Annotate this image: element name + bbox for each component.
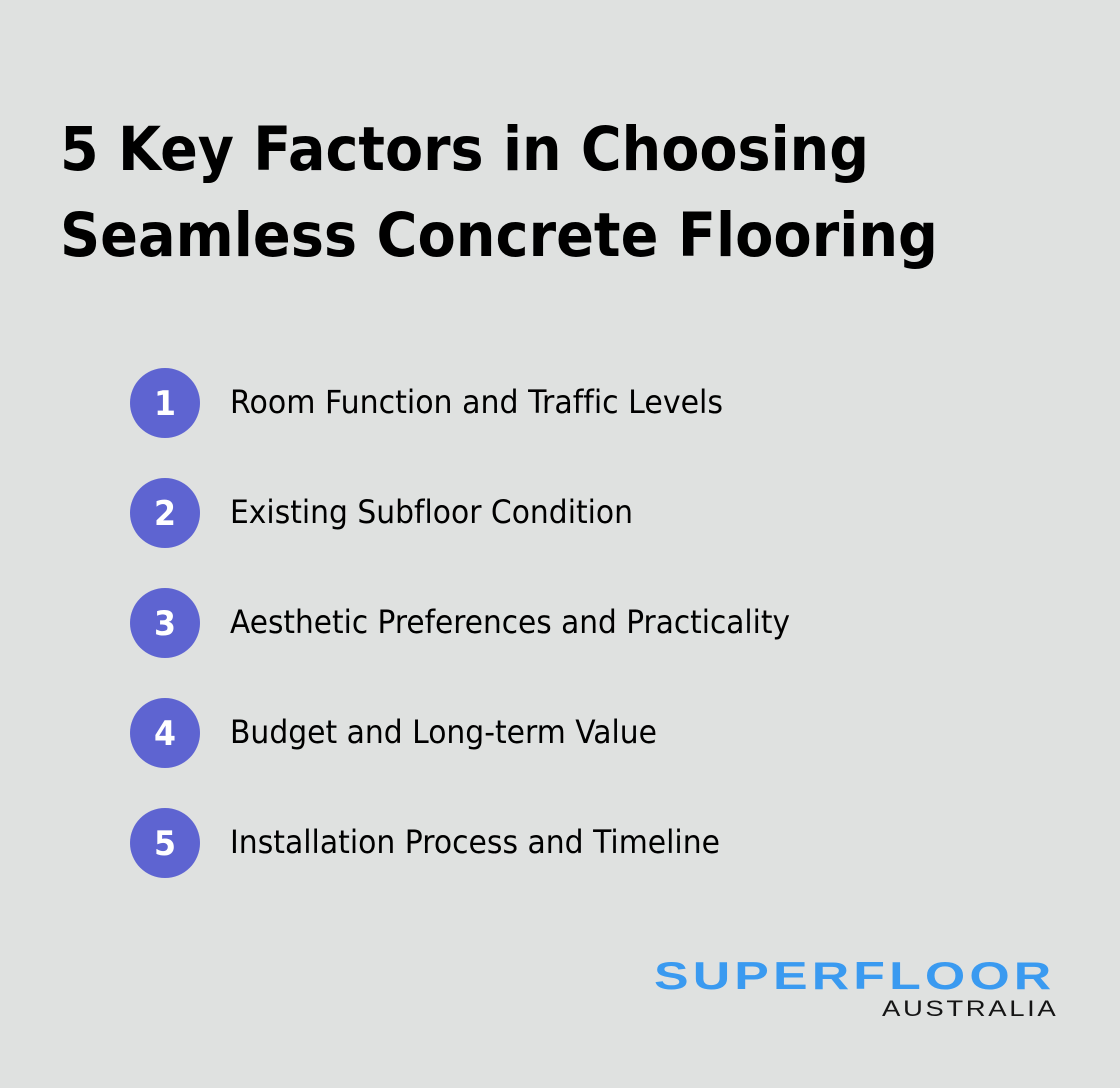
item 2: 2 bbox=[154, 494, 176, 534]
item 4 bbox=[130, 698, 657, 768]
logo: Superfloor Australia bbox=[654, 953, 1058, 1021]
item 4: 4 bbox=[154, 714, 176, 754]
item 3 bbox=[130, 588, 790, 658]
item 3: 3 bbox=[154, 604, 176, 644]
logo: Superfloor Australia: SUPERFLOOR bbox=[654, 953, 1055, 997]
item 3: Aesthetic Preferences and Practicality bbox=[230, 603, 790, 641]
item 1: Room Function and Traffic Levels bbox=[230, 383, 723, 421]
item 1: 1 bbox=[154, 384, 176, 424]
item 1 bbox=[130, 368, 723, 438]
title bbox=[60, 115, 938, 271]
item 5: 5 bbox=[154, 824, 176, 864]
item 5 bbox=[130, 808, 720, 878]
item 4: Budget and Long-term Value bbox=[230, 713, 657, 751]
item 2 bbox=[130, 478, 633, 548]
item 5: Installation Process and Timeline bbox=[230, 823, 720, 861]
list of factors bbox=[130, 368, 790, 878]
logo: Superfloor Australia: AUSTRALIA bbox=[882, 997, 1058, 1021]
title: Seamless Concrete Flooring bbox=[60, 201, 938, 271]
item 2: Existing Subfloor Condition bbox=[230, 493, 633, 531]
title: 5 Key Factors in Choosing bbox=[60, 115, 869, 185]
